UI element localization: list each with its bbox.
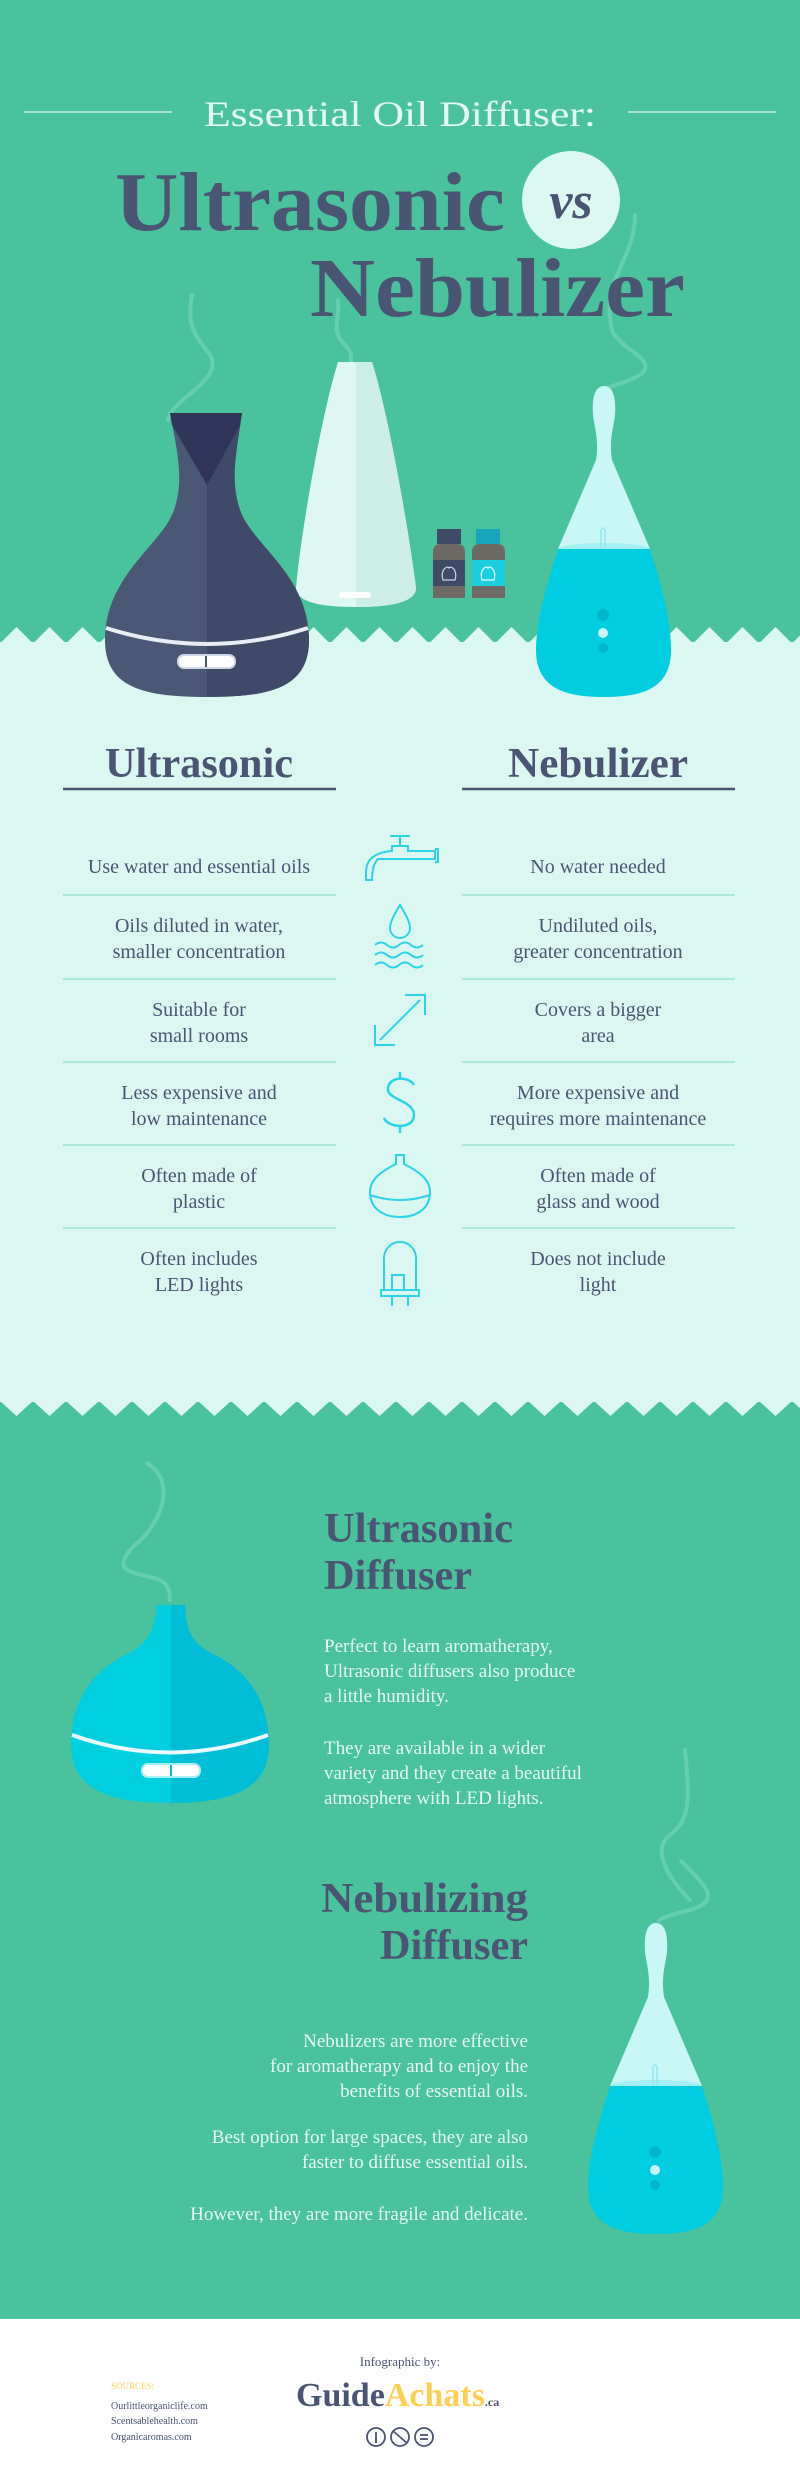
icon: diffuser dome bbox=[370, 1155, 430, 1217]
vs badge: vs bbox=[549, 173, 593, 230]
heading: Nebulizing Diffuser: Nebulizing bbox=[321, 1876, 528, 1922]
text: nebulizer description: faster to diffuse essential oils. bbox=[302, 2152, 528, 2173]
steam: ultrasonic section bbox=[123, 1463, 690, 1900]
text: nebulizer description: Nebulizers are more effective bbox=[303, 2031, 528, 2052]
text: ultrasonic description: variety and they create a beautiful bbox=[324, 1763, 582, 1784]
comparison text rows: Use water and essential oils bbox=[88, 856, 310, 878]
comparison text rows: Does not include bbox=[530, 1248, 666, 1270]
title: Essential Oil Diffuser: Essential Oil Diffuser: bbox=[204, 94, 596, 134]
text: nebulizer description: for aromatherapy and to enjoy the bbox=[270, 2056, 528, 2077]
heading: Ultrasonic Diffuser bbox=[324, 1506, 513, 1599]
comparison text rows: Oils diluted in water, bbox=[115, 915, 283, 937]
comparison text rows: plastic bbox=[173, 1191, 225, 1213]
text: nebulizer description: Best option for large spaces, they are also bbox=[212, 2127, 528, 2148]
footer: credit logo: Infographic by: bbox=[360, 2354, 440, 2369]
row separators bbox=[63, 895, 735, 1228]
heading: Nebulizing Diffuser: Diffuser bbox=[380, 1923, 528, 1969]
column header: Nebulizer: Nebulizer bbox=[508, 741, 688, 787]
comparison text rows: greater concentration bbox=[513, 941, 683, 963]
footer: sources: Scentsablehealth.com bbox=[111, 2416, 198, 2427]
comparison text rows: LED lights bbox=[155, 1274, 243, 1296]
footer: license icons bbox=[367, 2428, 433, 2446]
heading: Ultrasonic vs Nebulizer: Nebulizer bbox=[310, 242, 685, 335]
illustration: nebulizer bottom bbox=[588, 1860, 723, 2234]
text: nebulizer description bbox=[190, 2031, 528, 2225]
steam decorations bbox=[168, 215, 646, 420]
text: ultrasonic description bbox=[324, 1636, 582, 1809]
text: ultrasonic description: Ultrasonic diffusers also produce bbox=[324, 1661, 575, 1682]
comparison text rows: Less expensive and bbox=[121, 1082, 277, 1104]
comparison text rows: small rooms bbox=[150, 1025, 248, 1047]
heading: Nebulizing Diffuser bbox=[321, 1876, 528, 1969]
heading: Ultrasonic vs Nebulizer: Ultrasonic bbox=[115, 156, 505, 249]
comparison text rows: Covers a bigger bbox=[535, 999, 662, 1021]
comparison text rows: glass and wood bbox=[536, 1191, 660, 1213]
text: ultrasonic description: Perfect to learn aromatherapy, bbox=[324, 1636, 553, 1657]
text: nebulizer description: benefits of essential oils. bbox=[340, 2081, 528, 2102]
comparison text rows: Suitable for bbox=[152, 999, 246, 1021]
comparison text rows: requires more maintenance bbox=[490, 1108, 706, 1130]
illustration: dark ultrasonic diffuser bbox=[105, 413, 309, 697]
text: ultrasonic description: a little humidity. bbox=[324, 1686, 449, 1707]
comparison text rows: smaller concentration bbox=[113, 941, 285, 963]
icon: LED bbox=[381, 1242, 419, 1306]
text: nebulizer description: However, they are more fragile and delicate. bbox=[190, 2204, 528, 2225]
illustration: oil bottles bbox=[433, 529, 505, 598]
illustration: cyan ultrasonic diffuser bbox=[71, 1605, 269, 1803]
footer background bbox=[0, 2319, 800, 2486]
column header: Ultrasonic: Ultrasonic bbox=[105, 741, 293, 787]
text: ultrasonic description: They are available in a wider bbox=[324, 1738, 546, 1759]
heading: Ultrasonic Diffuser: Diffuser bbox=[324, 1553, 472, 1599]
comparison text rows: Often includes bbox=[140, 1248, 258, 1270]
comparison text rows: area bbox=[581, 1025, 615, 1047]
comparison text rows: Undiluted oils, bbox=[539, 915, 657, 937]
light comparison background bbox=[0, 642, 800, 1402]
icon: tap bbox=[366, 836, 438, 880]
footer: sources: Organicaromas.com bbox=[111, 2432, 192, 2443]
heading: Ultrasonic Diffuser: Ultrasonic bbox=[324, 1506, 513, 1552]
icon: dollar bbox=[384, 1072, 414, 1133]
heading: Ultrasonic vs Nebulizer bbox=[115, 151, 685, 335]
comparison text rows: More expensive and bbox=[517, 1082, 679, 1104]
footer: sources: Ourlittleorganiclife.com bbox=[111, 2401, 208, 2412]
vs badge bbox=[522, 151, 620, 249]
footer: sources: SOURCES: bbox=[111, 2381, 154, 2391]
comparison text rows: Often made of bbox=[540, 1165, 656, 1187]
footer: sources bbox=[111, 2381, 208, 2443]
comparison text rows: Often made of bbox=[141, 1165, 257, 1187]
icon: expand arrows bbox=[375, 995, 425, 1045]
comparison text rows: low maintenance bbox=[131, 1108, 267, 1130]
footer: credit logo bbox=[296, 2354, 499, 2414]
illustration: white tall diffuser bbox=[296, 362, 416, 607]
illustration: nebulizer diffuser bbox=[536, 386, 671, 697]
comparison text rows: light bbox=[580, 1274, 617, 1296]
comparison text rows bbox=[88, 856, 706, 1296]
footer: credit logo: GuideAchats.ca bbox=[296, 2377, 499, 2414]
icon: water drop bbox=[375, 905, 423, 968]
text: ultrasonic description: atmosphere with LED lights. bbox=[324, 1788, 544, 1809]
comparison text rows: No water needed bbox=[530, 856, 666, 878]
